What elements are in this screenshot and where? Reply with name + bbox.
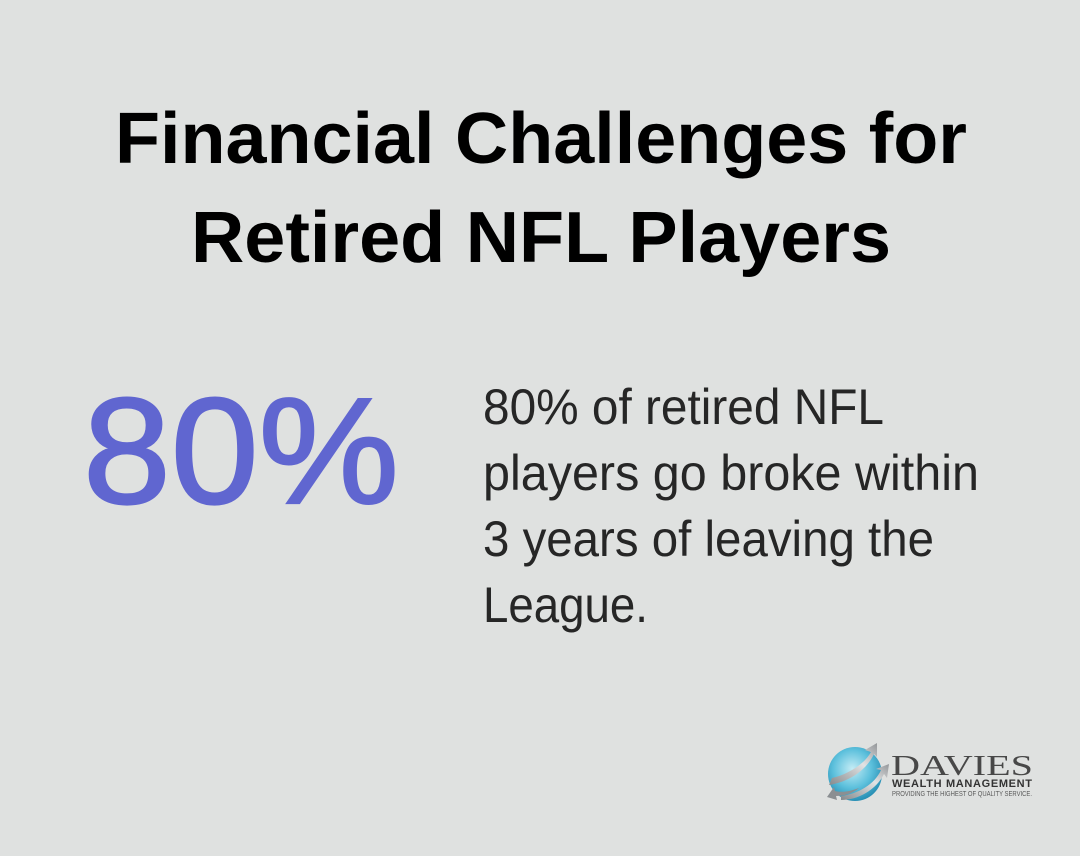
logo tagline: PROVIDING THE HIGHEST OF QUALITY SERVICE. (892, 791, 1032, 798)
description text: 3 years of leaving the (483, 511, 934, 567)
description text: players go broke within (483, 445, 979, 501)
logo: Davies Wealth Management (827, 743, 1033, 801)
title (115, 99, 967, 278)
description text: League. (483, 577, 648, 633)
description text: 80% of retired NFL (483, 379, 884, 435)
big statistic: 80%: 80% (83, 366, 399, 535)
logo wordmark: DAVIES (891, 751, 1033, 782)
icon: globe with arrows (827, 743, 889, 801)
title: Financial Challenges for (115, 99, 967, 179)
title: Retired NFL Players (191, 198, 891, 278)
logo subtitle: WEALTH MANAGEMENT (892, 778, 1032, 790)
description text (483, 379, 979, 633)
